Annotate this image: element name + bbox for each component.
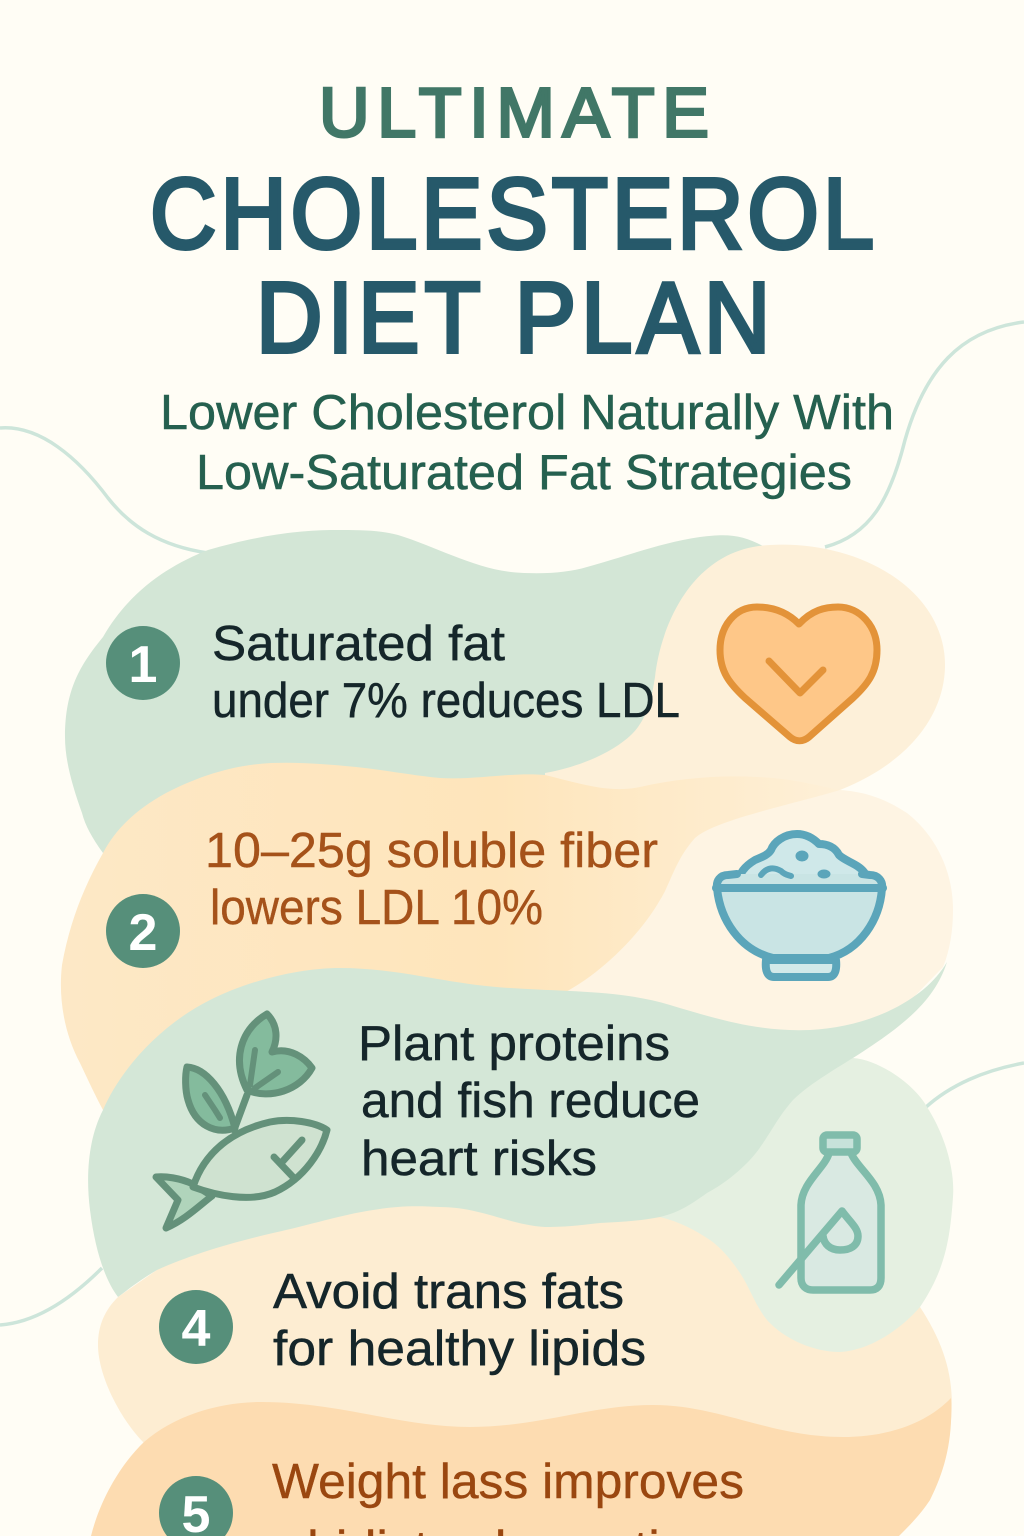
badge: 2 (106, 894, 180, 968)
text: step 3 (358, 1017, 700, 1186)
icon: plant and fish (156, 1014, 327, 1228)
text: step 2: 10–25g soluble fiber (205, 824, 658, 878)
badge: 1: 1 (129, 636, 157, 694)
text: step 2 (205, 824, 658, 935)
title (150, 74, 874, 374)
text: step 5: Weight lass improves (272, 1455, 744, 1509)
badge: 5 (159, 1476, 233, 1536)
text: step 4 (273, 1265, 646, 1376)
subtitle: Low-Saturated Fat Strategies (196, 446, 852, 500)
text: step 1 (212, 617, 680, 728)
panel: step 3 green blob (88, 962, 947, 1297)
text: step 1: Saturated fat (212, 617, 505, 671)
panel: step 5 orange blob (91, 1398, 951, 1536)
heading: cholesterol: CHOLESTEROL (150, 158, 874, 270)
panel: step 1 green blob (65, 530, 770, 853)
panel: step 2 icon light blob (540, 790, 953, 1032)
text: step 2: lowers LDL 10% (210, 881, 543, 935)
subtitle (160, 386, 894, 500)
icon: heart with down arrow (720, 607, 877, 741)
badge: 1 (106, 626, 180, 700)
text: step 4: for healthy lipids (273, 1322, 646, 1376)
badge: 4 (159, 1290, 233, 1364)
panel: step 1 icon cream blob (545, 545, 945, 800)
text: step 5 (272, 1455, 744, 1536)
badge: 4: 4 (182, 1300, 211, 1358)
icon: bowl of oats (716, 834, 883, 977)
subtitle: Lower Cholesterol Naturally With (160, 386, 894, 440)
text: step 3: and fish reduce (361, 1074, 700, 1128)
heading: diet plan: DIET PLAN (256, 262, 770, 374)
panel: step 2 orange blob (61, 763, 840, 1110)
panel: step 4 cream blob (98, 1180, 952, 1520)
badge: 2: 2 (129, 904, 157, 962)
text: step 3: Plant proteins (358, 1017, 670, 1071)
panel: step 3 pale green icon blob (660, 1058, 953, 1352)
icon: oil bottle crossed out (779, 1135, 881, 1290)
text: step 4: Avoid trans fats (273, 1265, 624, 1319)
heading: ultimate: ULTIMATE (319, 74, 709, 152)
text: step 1: under 7% reduces LDL (212, 674, 680, 728)
text: step 3: heart risks (361, 1132, 597, 1186)
